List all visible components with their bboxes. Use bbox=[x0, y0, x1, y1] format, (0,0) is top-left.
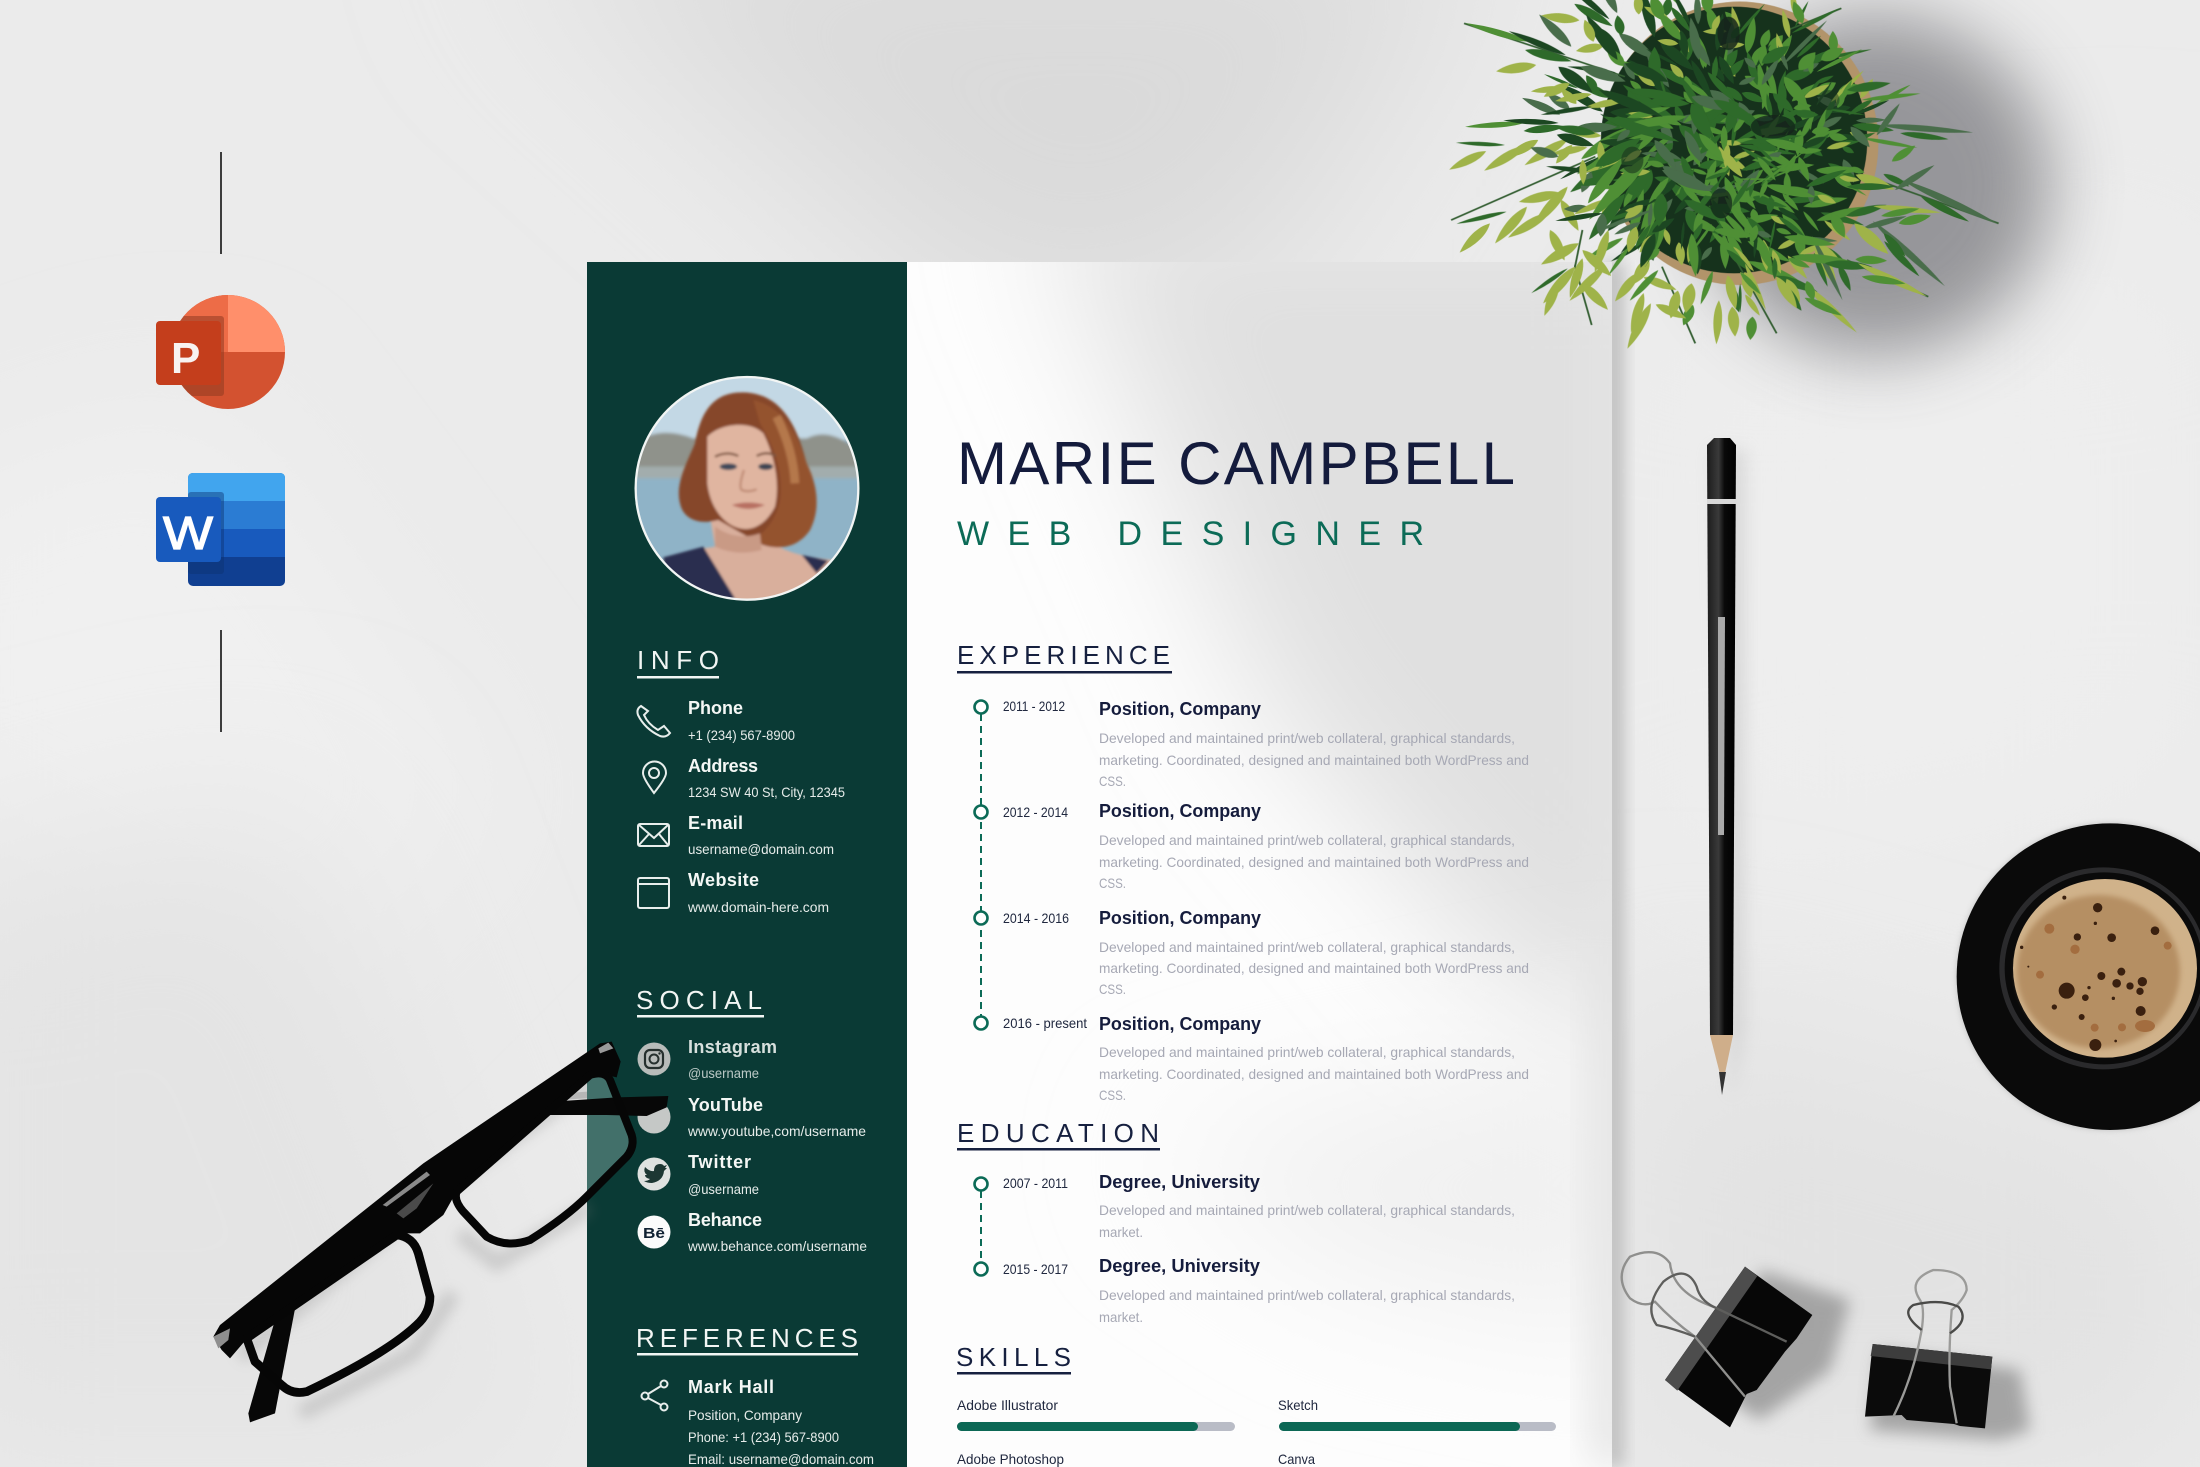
reference: mark hall bbox=[642, 1377, 874, 1467]
skill: adobe illustrator: Adobe Illustrator bbox=[957, 1397, 1058, 1413]
divider line top bbox=[220, 152, 222, 254]
social: twitter: Twitter bbox=[688, 1152, 751, 1172]
plant bbox=[1449, 0, 1999, 349]
experience timeline bbox=[974, 700, 988, 1030]
right clip bbox=[1865, 1270, 1992, 1428]
heading: education: EDUCATION bbox=[957, 1118, 1159, 1148]
experience entry 2: Position, Company bbox=[1099, 800, 1262, 821]
social: youtube: www.youtube,com/username bbox=[687, 1123, 866, 1139]
education entry 1 bbox=[1003, 1171, 1515, 1240]
experience entry 4: 2016 - present bbox=[1003, 1015, 1087, 1031]
experience entry 1: Position, Company bbox=[1099, 698, 1262, 719]
social: behance: Bē bbox=[643, 1226, 665, 1242]
left clip bbox=[1622, 1252, 1812, 1427]
binder clips shadow bbox=[1730, 1270, 2030, 1440]
contact: address bbox=[643, 756, 845, 800]
skill: canva: Canva bbox=[1278, 1451, 1315, 1467]
skill: sketch: Sketch bbox=[1278, 1397, 1318, 1413]
reference: mark hall: Position, Company bbox=[688, 1407, 802, 1423]
education entry 1: 2007 - 2011 bbox=[1003, 1175, 1068, 1191]
social: behance: Behance bbox=[688, 1210, 762, 1230]
contact: phone bbox=[637, 698, 795, 743]
contact: website: Website bbox=[688, 870, 759, 890]
heading: skills: SKILLS bbox=[956, 1342, 1071, 1372]
icon: word: W bbox=[163, 507, 214, 559]
experience entry 1: 2011 - 2012 bbox=[1003, 698, 1065, 714]
contact: address: 1234 SW 40 St, City, 12345 bbox=[688, 784, 845, 800]
education entry 2: Developed and maintained print/web collateral, graphical standards, bbox=[1099, 1287, 1515, 1303]
contact: email: username@domain.com bbox=[688, 841, 834, 857]
experience entry 1: marketing. Coordinated, designed and maintained both WordPress and bbox=[1099, 752, 1529, 768]
experience entry 3: CSS. bbox=[1099, 981, 1126, 997]
left lens rim bbox=[247, 1235, 430, 1392]
skill: adobe illustrator bbox=[957, 1397, 1235, 1431]
experience entry 3: marketing. Coordinated, designed and maintained both WordPress and bbox=[1099, 960, 1529, 976]
reference: mark hall: Email: username@domain.com bbox=[688, 1451, 874, 1467]
reference: mark hall: Phone: +1 (234) 567-8900 bbox=[688, 1429, 839, 1445]
pencil bbox=[1707, 438, 1746, 1100]
far temple arms bbox=[248, 1096, 668, 1422]
social: instagram: Instagram bbox=[688, 1037, 777, 1057]
education entry 2: 2015 - 2017 bbox=[1003, 1261, 1068, 1277]
experience entry 3 bbox=[1003, 907, 1529, 997]
paper shadow bbox=[1602, 262, 1624, 1467]
frame top bar bbox=[213, 1042, 621, 1358]
education entry 1: Developed and maintained print/web collateral, graphical standards, bbox=[1099, 1202, 1515, 1218]
education entry 1: Degree, University bbox=[1099, 1171, 1261, 1192]
heading: social: SOCIAL bbox=[636, 985, 762, 1015]
social: behance: www.behance.com/username bbox=[687, 1238, 867, 1254]
contact: website: www.domain-here.com bbox=[687, 899, 829, 915]
icon: word bbox=[156, 473, 285, 586]
education entry 1: market. bbox=[1099, 1224, 1143, 1240]
contact: website bbox=[638, 870, 829, 915]
experience entry 2: CSS. bbox=[1099, 875, 1126, 891]
contact: phone: Phone bbox=[688, 698, 743, 718]
contact: email: E-mail bbox=[688, 813, 743, 833]
social: behance bbox=[638, 1210, 867, 1254]
right lens rim bbox=[456, 1073, 633, 1243]
contact: email bbox=[638, 813, 834, 857]
icon: powerpoint bbox=[156, 295, 285, 409]
contact: phone: +1 (234) 567-8900 bbox=[688, 727, 795, 743]
resume paper bbox=[907, 262, 1612, 1467]
experience entry 4: Developed and maintained print/web collateral, graphical standards, bbox=[1099, 1044, 1515, 1060]
divider line bottom bbox=[220, 630, 222, 732]
experience entry 4: marketing. Coordinated, designed and maintained both WordPress and bbox=[1099, 1066, 1529, 1082]
experience entry 3: Developed and maintained print/web collateral, graphical standards, bbox=[1099, 939, 1515, 955]
binder clips bbox=[1620, 1251, 1992, 1428]
experience entry 1: Developed and maintained print/web collateral, graphical standards, bbox=[1099, 730, 1515, 746]
social: instagram: @username bbox=[688, 1065, 759, 1081]
experience entry 3: 2014 - 2016 bbox=[1003, 910, 1069, 926]
social: youtube: YouTube bbox=[688, 1095, 763, 1115]
reference: mark hall: Mark Hall bbox=[688, 1377, 774, 1397]
experience entry 4 bbox=[1003, 1013, 1529, 1103]
heading: info: INFO bbox=[637, 645, 719, 675]
name title: MARIE CAMPBELL bbox=[957, 430, 1515, 497]
experience entry 2: marketing. Coordinated, designed and maintained both WordPress and bbox=[1099, 854, 1529, 870]
experience entry 1: CSS. bbox=[1099, 773, 1126, 789]
skill: adobe photoshop: Adobe Photoshop bbox=[957, 1451, 1064, 1467]
education entry 2 bbox=[1003, 1255, 1515, 1325]
education entry 2: Degree, University bbox=[1099, 1255, 1261, 1276]
experience entry 2 bbox=[1003, 800, 1529, 891]
experience entry 1 bbox=[1003, 698, 1529, 789]
education timeline bbox=[974, 1178, 988, 1276]
social: twitter bbox=[638, 1152, 759, 1197]
job subtitle: WEB DESIGNER bbox=[957, 515, 1424, 553]
social: youtube bbox=[638, 1095, 866, 1139]
plant shadow bbox=[1700, 15, 2050, 355]
skill: sketch bbox=[1278, 1397, 1556, 1431]
experience entry 4: CSS. bbox=[1099, 1087, 1126, 1103]
sidebar panel bbox=[587, 262, 907, 1467]
experience entry 4: Position, Company bbox=[1099, 1013, 1262, 1034]
lens tint over sidebar bbox=[587, 1073, 632, 1197]
experience entry 3: Position, Company bbox=[1099, 907, 1262, 928]
education entry 2: market. bbox=[1099, 1309, 1143, 1325]
heading: references: REFERENCES bbox=[636, 1323, 858, 1353]
social: twitter: @username bbox=[688, 1181, 759, 1197]
icon: powerpoint: P bbox=[171, 334, 200, 383]
social: instagram bbox=[638, 1037, 777, 1081]
experience entry 2: Developed and maintained print/web collateral, graphical standards, bbox=[1099, 832, 1515, 848]
contact: address: Address bbox=[688, 756, 758, 776]
heading: experience: EXPERIENCE bbox=[957, 640, 1170, 670]
glasses shadow bbox=[240, 1077, 600, 1413]
experience entry 2: 2012 - 2014 bbox=[1003, 804, 1068, 820]
coffee cup and saucer bbox=[1954, 821, 2200, 1132]
portrait photo bbox=[634, 376, 860, 601]
glasses bbox=[213, 1042, 668, 1422]
